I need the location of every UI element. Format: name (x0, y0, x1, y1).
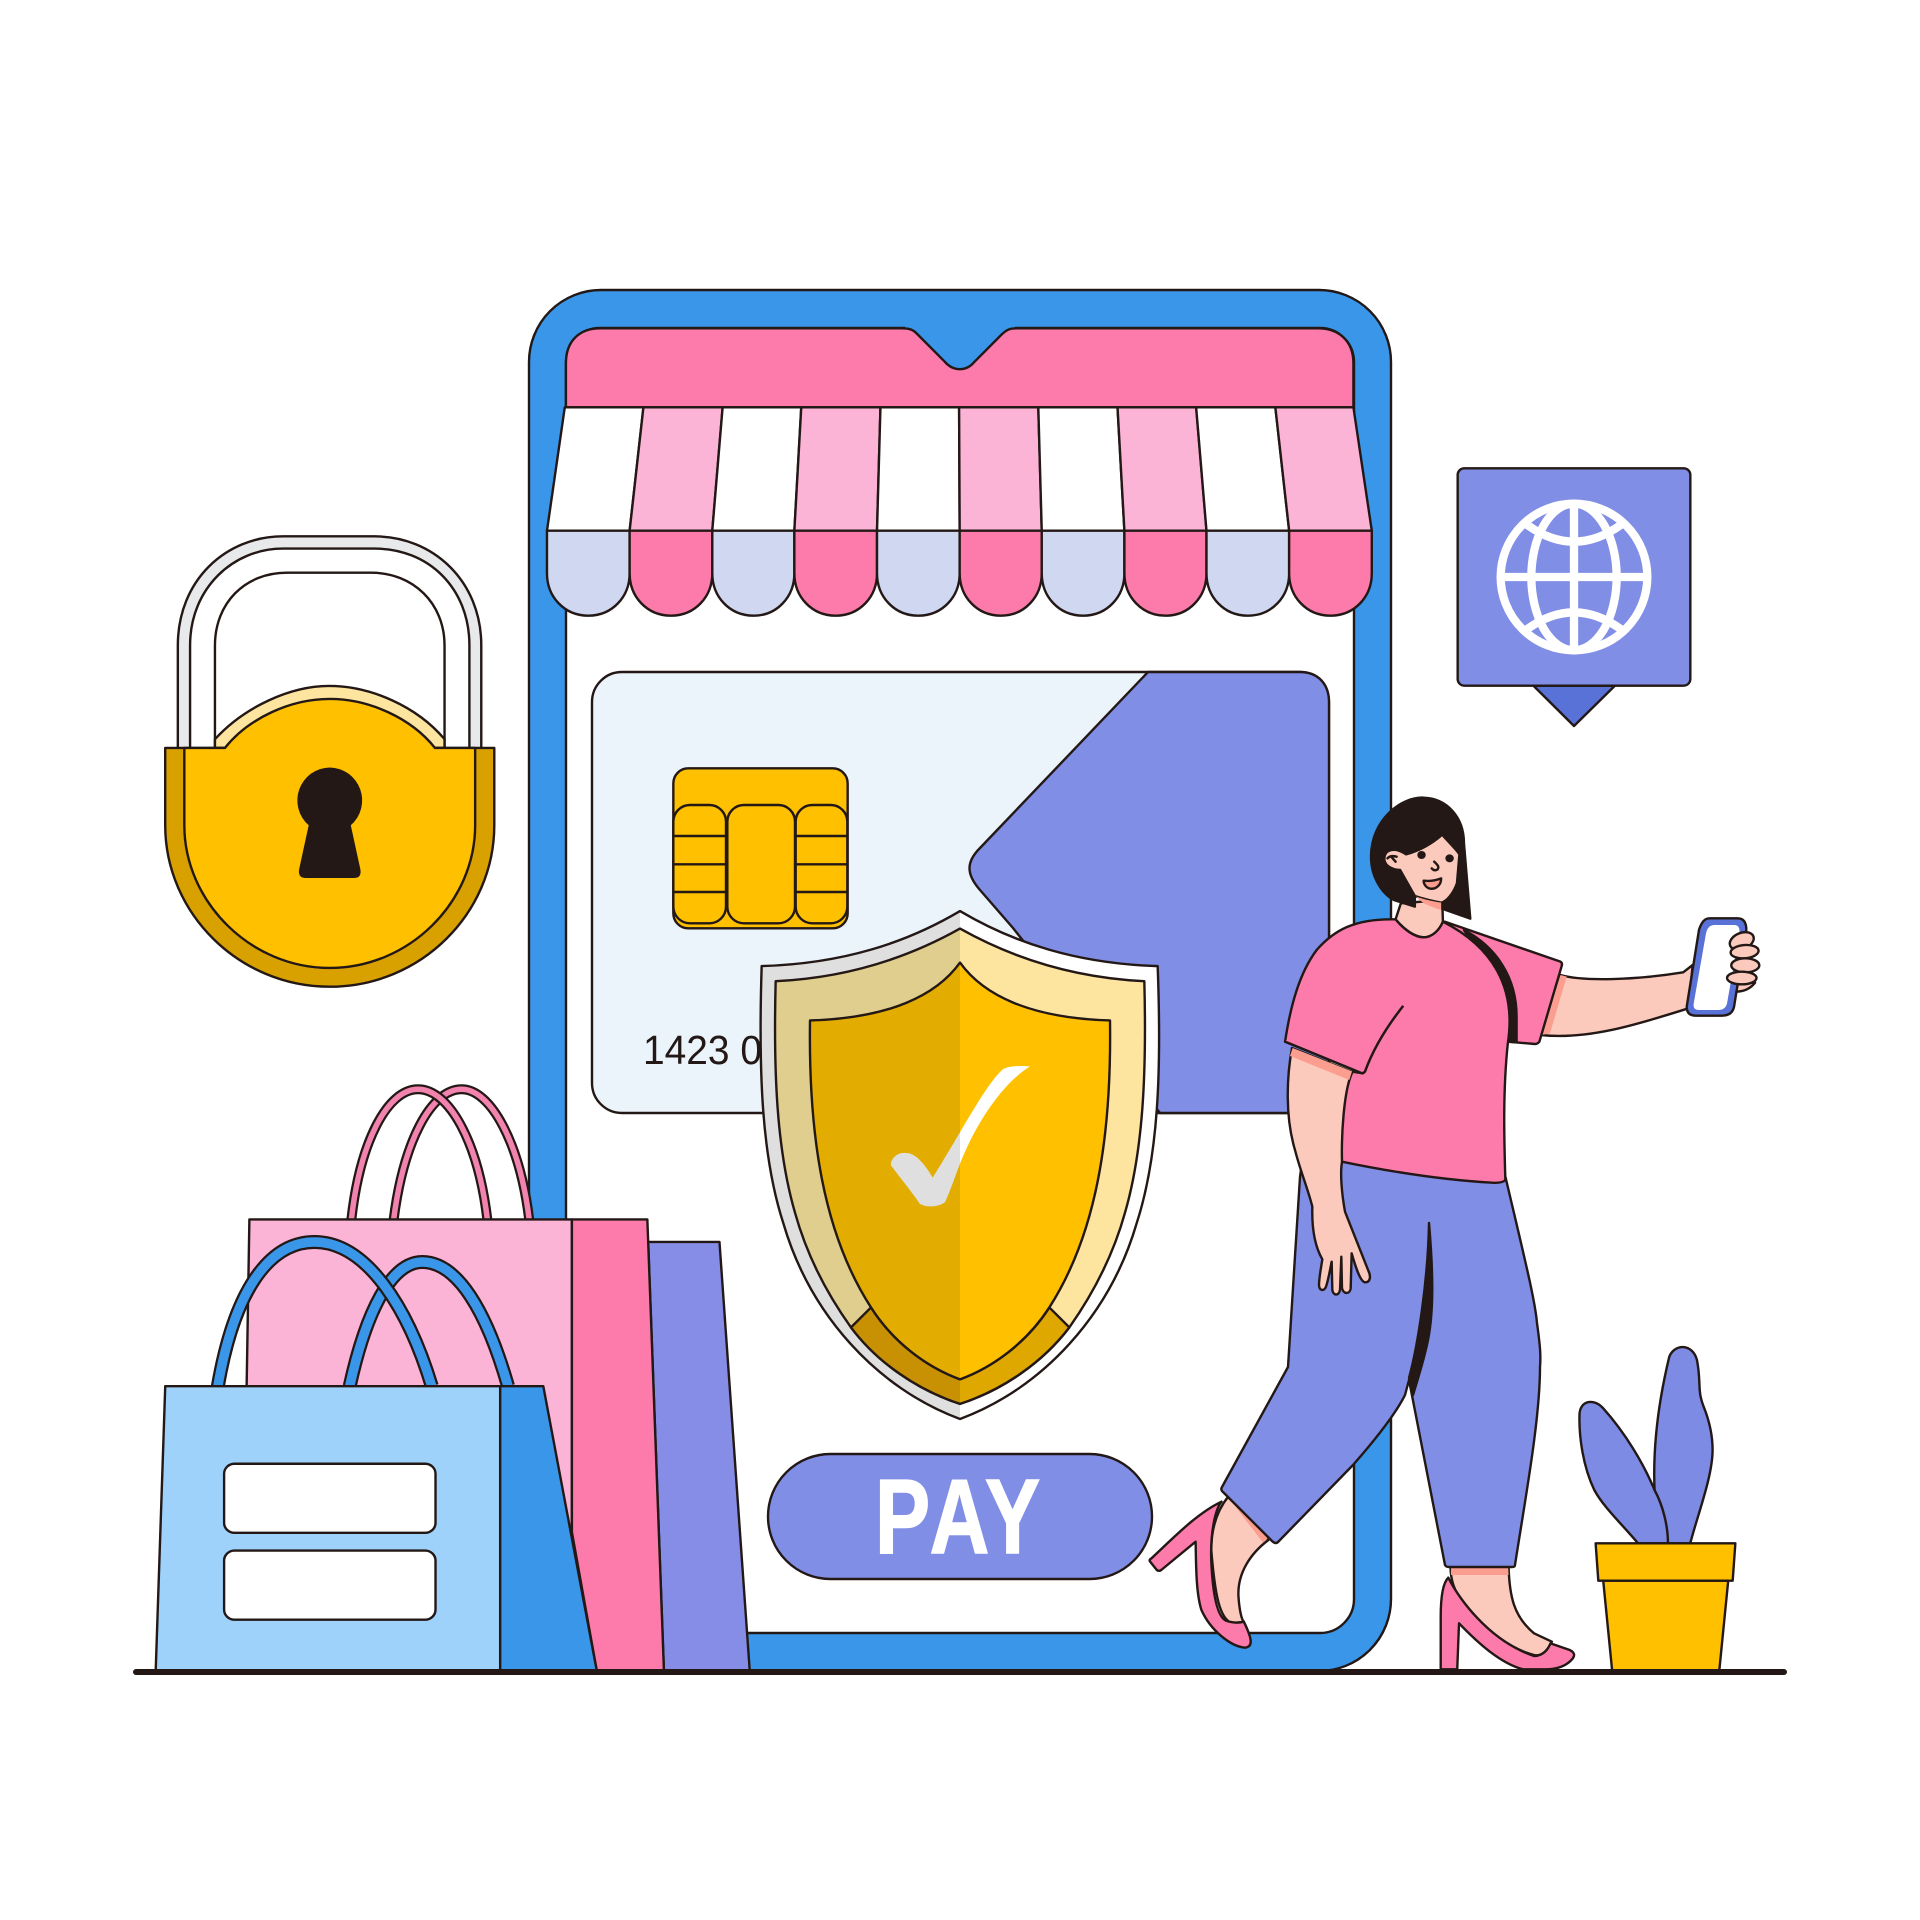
lock body outer (165, 748, 494, 987)
lowered arm and hand (1288, 1048, 1370, 1294)
phone screen (566, 328, 1354, 1633)
eyes (1417, 851, 1454, 862)
plant left leaf (1579, 1402, 1668, 1543)
shield rim (761, 911, 1159, 1419)
potted plant (1579, 1347, 1735, 1671)
bag label lower (224, 1551, 436, 1620)
face (1384, 835, 1459, 903)
trousers (1221, 1140, 1540, 1567)
lock shackle (178, 536, 481, 749)
card purple panel (970, 672, 1329, 1113)
palm (1736, 983, 1755, 992)
nose (1432, 862, 1438, 870)
neck shadow (1416, 897, 1441, 910)
extended arm and far sleeve (1445, 922, 1693, 1044)
lock highlight arc (215, 686, 445, 748)
button label: PAY (875, 1458, 1040, 1576)
shop awning (547, 328, 1372, 616)
trouser crease (1409, 1223, 1432, 1395)
pot base (1603, 1581, 1728, 1671)
awning scallops (547, 531, 1372, 616)
keyhole (297, 767, 362, 878)
handheld phone and fingers (1687, 918, 1759, 1016)
pot rim (1596, 1543, 1735, 1581)
lock body face (184, 699, 475, 968)
fingers (1727, 929, 1759, 984)
card base (592, 672, 1329, 1113)
button pill (768, 1454, 1152, 1579)
bag label upper (224, 1464, 436, 1533)
card number: 1423 0 (643, 1027, 762, 1073)
blue bag front (156, 1386, 500, 1671)
head (1371, 798, 1470, 919)
credit card (592, 672, 1329, 1113)
blue bag side (500, 1386, 597, 1671)
phone notch fill (905, 320, 1015, 380)
card chip (673, 768, 848, 928)
neck (1396, 900, 1443, 937)
pay button (768, 1454, 1152, 1579)
t-shirt (1285, 919, 1510, 1183)
phone body (529, 290, 1391, 1671)
shield bottom band (851, 1307, 1069, 1404)
purple bag (648, 1242, 750, 1671)
shield inner rim (775, 929, 1145, 1404)
woman with phone (1150, 798, 1759, 1669)
front foot and shoe (1441, 1567, 1574, 1669)
padlock (165, 536, 494, 987)
check mark (891, 1066, 1030, 1206)
security shield (761, 911, 1159, 1419)
smartphone storefront (529, 290, 1391, 1671)
pink bag handles (351, 1089, 529, 1219)
ear detail (1388, 856, 1397, 862)
ground line (136, 1669, 1784, 1675)
awning top band with notch (566, 328, 1353, 407)
globe location tag (1458, 468, 1690, 726)
phone display (1694, 925, 1739, 1010)
plant right leaf (1654, 1347, 1713, 1543)
hair (1371, 798, 1470, 919)
shopping bags (156, 1089, 750, 1671)
blue bag handles (218, 1242, 508, 1386)
back foot and shoe (1150, 1497, 1269, 1648)
sleeve edge (1285, 960, 1403, 1073)
mouth (1424, 878, 1441, 889)
tag body (1458, 468, 1690, 686)
shield core (810, 963, 1110, 1379)
phone case (1687, 918, 1746, 1016)
globe icon (1501, 504, 1647, 650)
pink bag side (572, 1219, 664, 1671)
tag pointer (1533, 686, 1615, 726)
pink bag front (242, 1219, 572, 1671)
awning stripes (547, 407, 1372, 531)
